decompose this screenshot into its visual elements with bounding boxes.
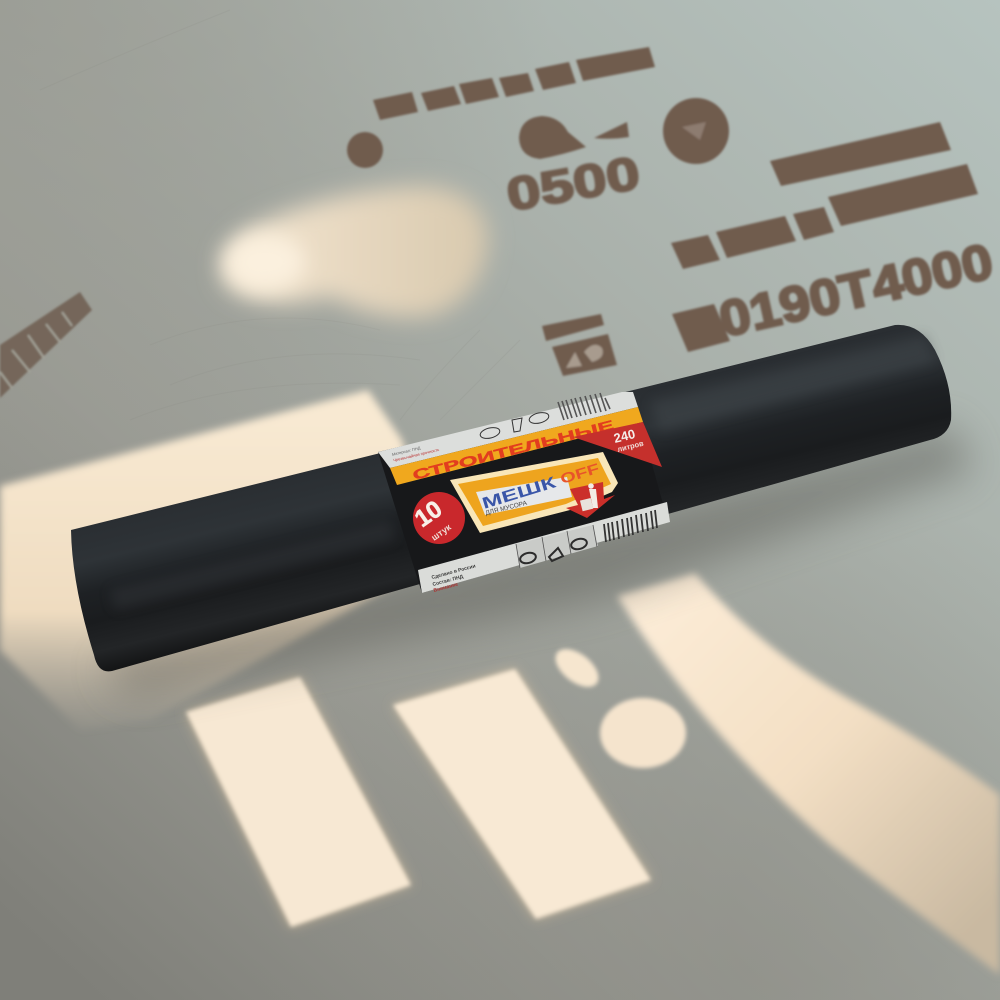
bottom icons panel [516,525,598,568]
red circle: 10 pieces [410,492,465,544]
projected icon: speech shape [519,116,629,159]
red corner: volume [573,422,662,467]
roll shadow [100,425,975,695]
projected stamp: left edge [0,292,92,398]
label body [378,392,668,593]
roll highlight [650,335,935,432]
projected icon: dot [347,132,383,168]
logo badge [450,452,618,533]
projected numbers: 0500: 0500 [503,146,644,221]
red corner: volume: 240 [612,426,637,446]
black trash bag roll [71,325,951,671]
red corner: volume: литров [616,439,645,454]
top white strip [378,392,638,468]
bottom fine print: Сделано в России [431,563,476,581]
light patch: circle [600,698,686,768]
light patch: rounded glow [222,186,488,317]
light patch: large left window [0,390,440,730]
bottom icons [516,525,597,568]
light patch: right beam [617,573,1000,975]
logo badge: ДЛЯ МУСОРА [485,500,528,517]
bottom barcode [604,510,657,542]
bottom fine print: Внимание [433,582,459,594]
red circle: 10 pieces: 10 [410,495,447,533]
projected icon: recycling stamp [542,314,617,376]
brand name: МЕШК [480,474,558,513]
light patch: small oval [549,642,605,694]
projected bars: right block [671,122,978,269]
projected icon: round badge [663,98,729,164]
bottom white strip [418,502,670,593]
roll left sheen [110,520,395,610]
top strip fine print: Материал: ПНД [391,445,421,457]
top strip fine print: Чрезвычайная прочность [393,447,440,463]
red arrow with bin [566,482,615,518]
light patch: lower left rectangle [185,676,412,928]
yellow strip [390,407,643,485]
product label [378,392,670,594]
bottom fine print [431,563,476,594]
bottom fine print: Состав: ПНД [432,574,464,588]
top strip icons [479,411,550,440]
heading: строительные: СТРОИТЕЛЬНЫЕ [411,417,615,483]
projected label: top row of bars [373,47,655,120]
red circle: 10 pieces: штук [429,522,453,543]
projected numbers: 0190T4000: 0190T4000 [714,233,998,348]
light patch: lower centre rectangle [392,668,652,920]
top barcode [558,393,610,420]
logo badge: OFF [558,460,602,487]
